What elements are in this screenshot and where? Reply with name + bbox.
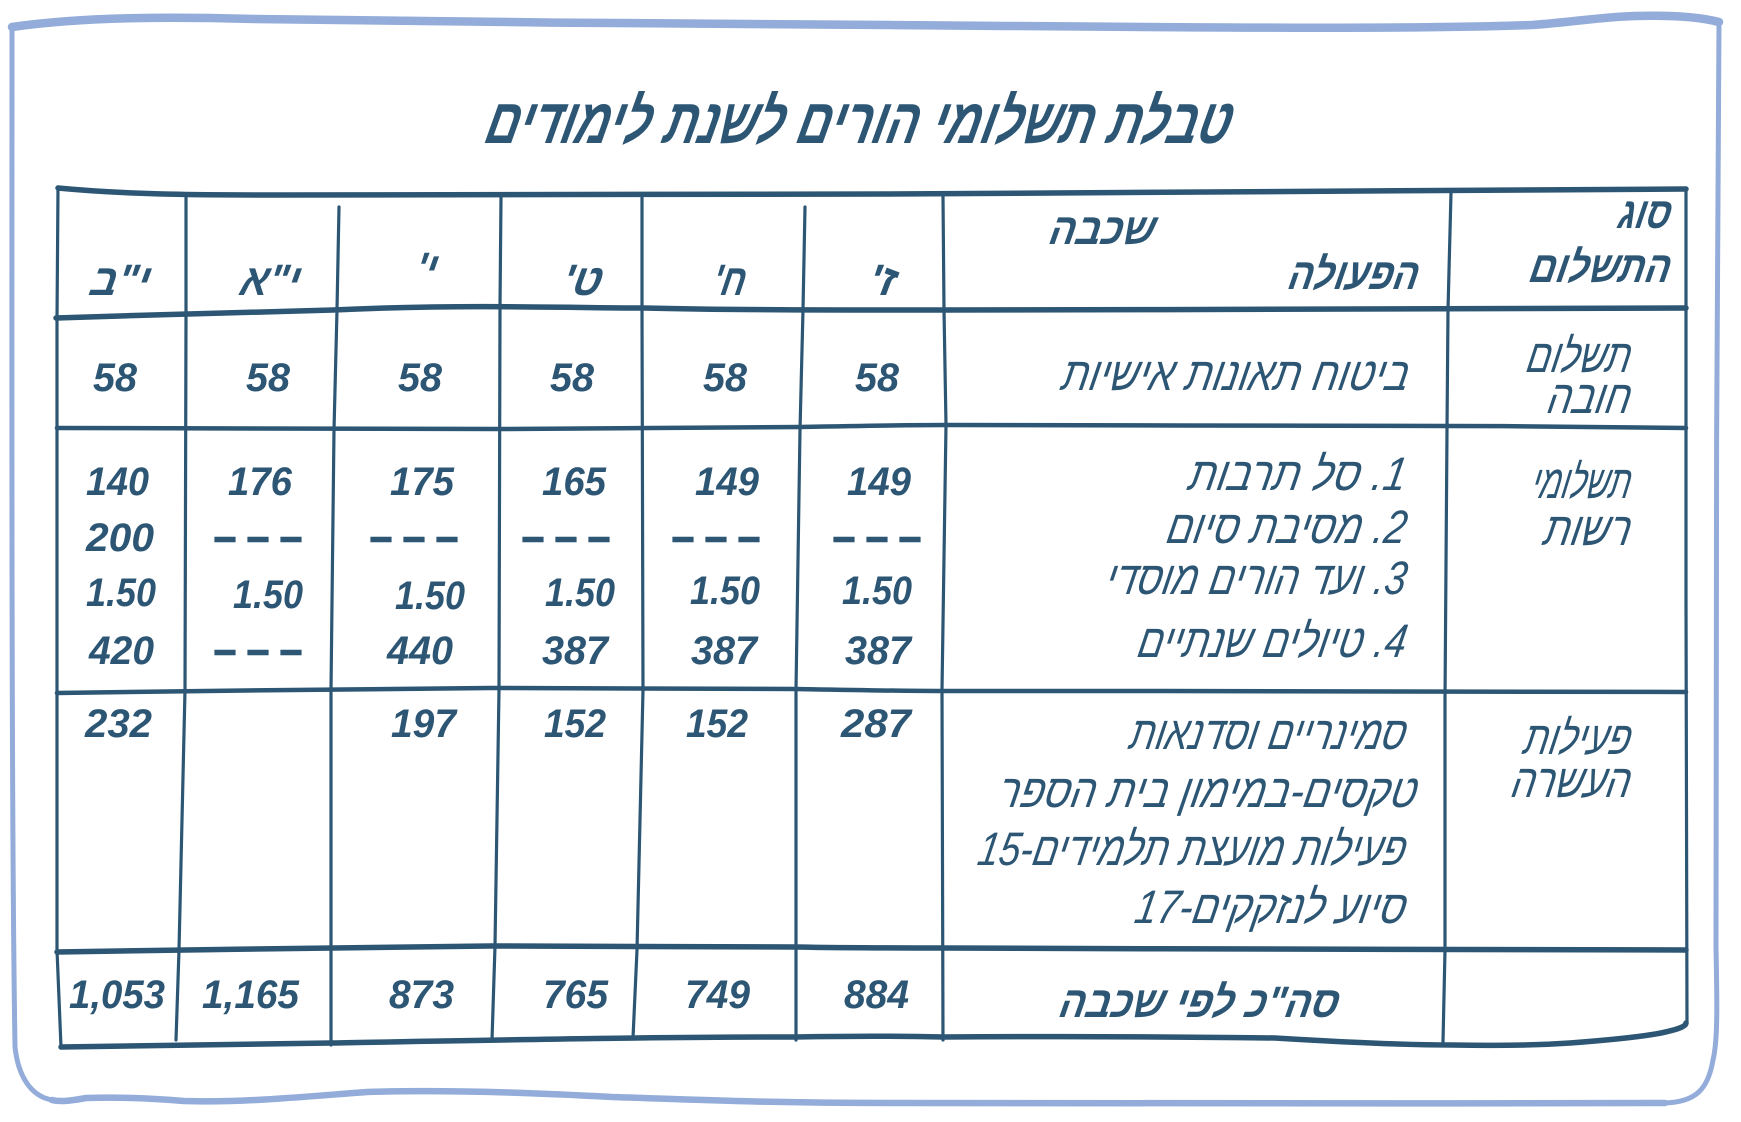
row: optional payments: 175 [390,460,455,504]
row: total per grade: 1,053 [69,973,165,1017]
row: optional payments: 420 [88,629,154,673]
row: optional payments: – – – [214,515,302,559]
header: grades [86,244,903,305]
row: optional payments: 165 [542,460,607,504]
row: total per grade: סה"כ לפי שכבה [1056,978,1344,1027]
header: payment type [1526,189,1676,292]
header: grades: י' [412,244,442,293]
row: enrichment activities: 197 [391,702,458,746]
row: optional payments: 149 [847,460,912,504]
header: grades: ז' [865,256,903,305]
header: grades: ח' [709,256,751,305]
row: optional payments: 1.50 [233,573,303,617]
header: activity and grade: הפעולה [1285,250,1424,299]
row: enrichment activities: סיוע לנזקקים-17 [1131,881,1411,934]
row: optional payments: 387 [845,629,913,673]
row: enrichment activities: 232 [84,702,152,746]
row: enrichment activities: סמינריים וסדנאות [1125,707,1411,760]
row: enrichment activities: 287 [840,702,913,746]
row: enrichment activities: 152 [686,702,748,746]
row: mandatory payment [93,330,1636,424]
row: enrichment activities: העשרה [1508,755,1636,808]
row: optional payments: תשלומי [1528,456,1636,509]
row: optional payments: 140 [86,460,149,504]
row: optional payments: 200 [85,516,154,560]
row: mandatory payment: 58 [855,356,900,400]
row: optional payments: 1.50 [842,569,912,613]
header: grades: י"א [236,256,305,305]
row: optional payments: – – – [214,628,302,672]
row: total per grade: 749 [685,973,751,1017]
row: enrichment activities: 152 [544,702,606,746]
row: total per grade: 765 [543,973,609,1017]
row: total per grade [69,973,1344,1027]
row: mandatory payment: 58 [550,356,595,400]
row: optional payments: 2. מסיבת סיום [1163,501,1411,554]
table [56,188,1687,1047]
row: optional payments: 1.50 [690,569,760,613]
row: optional payments: 1.50 [545,571,615,615]
row: optional payments: – – – [522,515,610,559]
header: activity and grade: שכבה [1046,205,1162,254]
table outline and row lines [56,188,1687,1047]
row: optional payments: 440 [386,629,453,673]
row: optional payments: 4. טיולים שנתיים [1134,615,1411,668]
row: mandatory payment: 58 [398,356,443,400]
row: enrichment activities [84,702,1636,934]
header: payment type: סוג [1614,189,1676,238]
row: mandatory payment: 58 [246,356,291,400]
row: mandatory payment: 58 [93,356,138,400]
row: mandatory payment: ביטוח תאונות אישיות [1057,348,1414,401]
row: optional payments: – – – [833,515,921,559]
row: total per grade: 873 [389,973,454,1017]
row: mandatory payment: 58 [703,356,748,400]
row: optional payments: 3. ועד הורים מוסדי [1102,552,1411,605]
row: optional payments: – – – [672,515,760,559]
row: optional payments: 176 [228,460,293,504]
row: enrichment activities: טקסים-במימון בית הספר [995,765,1422,818]
row: optional payments: 149 [695,460,760,504]
row: optional payments [85,448,1636,673]
title: טבלת תשלומי הורים לשנת לימודים [480,85,1240,157]
row: optional payments: 387 [691,629,759,673]
header: grades: ט' [559,256,607,305]
row: total per grade: 884 [844,973,909,1017]
row: total per grade: 1,165 [202,973,300,1017]
row: optional payments: רשות [1539,503,1636,556]
row: mandatory payment: תשלום [1523,330,1636,383]
row: mandatory payment: חובה [1544,371,1636,424]
row: enrichment activities: פעילות מועצת תלמידים-15 [974,823,1411,876]
row: optional payments: 1. סל תרבות [1184,448,1411,501]
column lines [176,193,1451,1045]
row: enrichment activities: פעילות [1519,712,1636,765]
header: grades: י"ב [86,256,155,305]
row: optional payments: 1.50 [395,574,465,618]
row: optional payments: 387 [542,629,610,673]
row: optional payments: 1.50 [86,571,156,615]
row: optional payments: – – – [370,515,458,559]
header: activity and grade [1046,205,1424,299]
header: payment type: התשלום [1526,243,1676,292]
